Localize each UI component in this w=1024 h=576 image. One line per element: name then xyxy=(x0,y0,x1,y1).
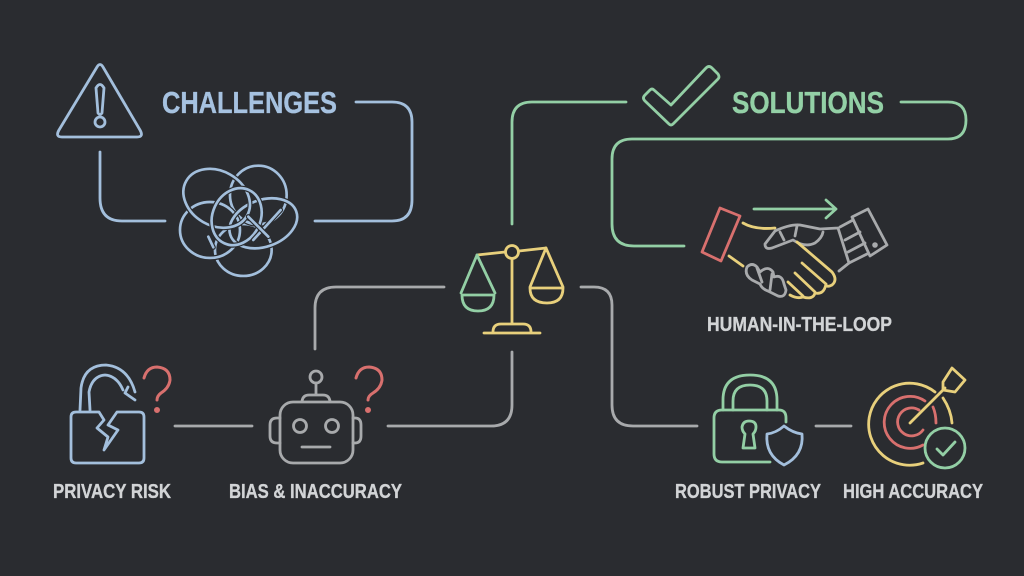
icon: question mark xyxy=(356,367,382,412)
panel: challenges xyxy=(58,64,412,276)
connector: warning to knot left xyxy=(100,152,165,221)
left cuff xyxy=(702,208,740,261)
yellow wrist strokes xyxy=(729,223,775,266)
label: human-in-the-loop: HUMAN-IN-THE-LOOP xyxy=(707,314,892,336)
right cuff xyxy=(840,209,887,263)
connector: scales to robust privacy xyxy=(581,287,697,426)
icon: handshake xyxy=(702,200,887,298)
connector: challenges to knot right xyxy=(315,102,412,221)
icon: check badge xyxy=(925,428,965,468)
panel: privacy risk xyxy=(53,365,171,503)
connector: privacy risk to bias xyxy=(175,425,252,427)
heading: solutions: SOLUTIONS xyxy=(732,85,884,120)
label: bias and inaccuracy: BIAS & INACCURACY xyxy=(229,481,403,503)
icon: tangled knot xyxy=(173,157,304,276)
panel: high accuracy xyxy=(843,368,984,503)
arrow xyxy=(754,200,836,218)
label: robust privacy: ROBUST PRIVACY xyxy=(675,481,822,503)
panel: robust privacy xyxy=(675,375,822,503)
icon: padlock xyxy=(714,375,786,462)
icon: question mark xyxy=(144,367,170,412)
label: high accuracy: HIGH ACCURACY xyxy=(843,481,984,503)
heading: challenges: CHALLENGES xyxy=(162,85,337,120)
panel: bias and inaccuracy xyxy=(229,367,403,503)
left pan xyxy=(461,255,495,311)
left hand fingers xyxy=(746,264,786,296)
icon: check mark xyxy=(644,66,719,125)
icon: target xyxy=(869,368,965,465)
connector: solutions to scales xyxy=(512,102,626,224)
icon: shield xyxy=(767,426,802,465)
right pan xyxy=(530,248,563,303)
icon: broken padlock xyxy=(71,365,144,463)
yellow fingers xyxy=(788,242,835,298)
label: privacy risk: PRIVACY RISK xyxy=(53,481,171,503)
connector: robust privacy to high accuracy xyxy=(816,425,851,427)
connector: scales down to robot xyxy=(388,352,512,426)
panel: solutions xyxy=(512,66,966,336)
connector: scales to bias xyxy=(315,287,444,349)
icon: warning triangle xyxy=(58,64,141,137)
right hand xyxy=(765,225,849,271)
beam, column and base xyxy=(477,246,546,333)
icon: balance scales xyxy=(461,246,563,333)
icon: robot xyxy=(270,371,361,463)
connector: solutions to human-in-the-loop xyxy=(612,102,966,246)
